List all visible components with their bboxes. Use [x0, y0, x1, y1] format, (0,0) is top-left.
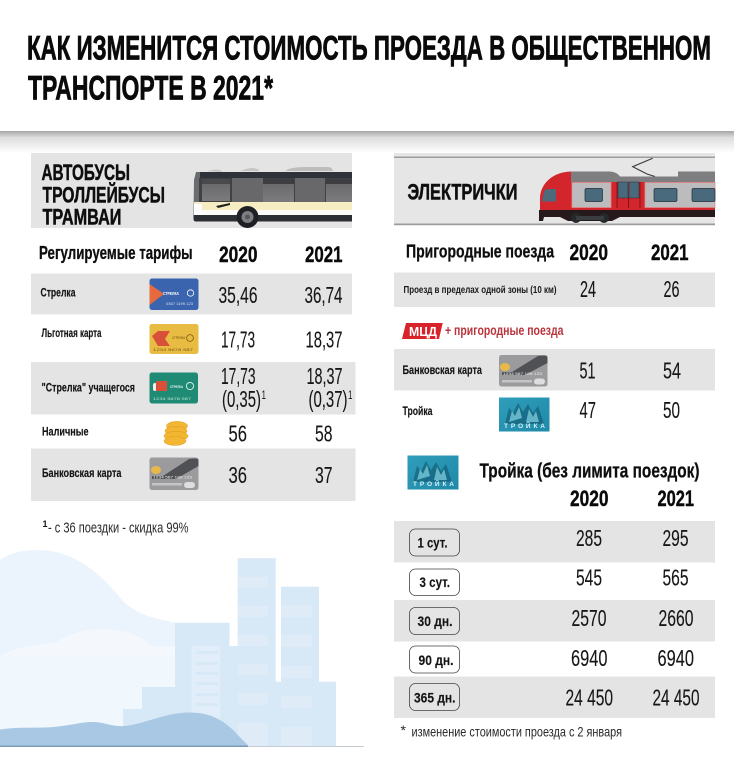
column headings: regulated fares: 2021 — [305, 242, 342, 267]
row: 3 days: 545 — [576, 564, 602, 590]
icon: green student card: 1234 5678 987 — [153, 397, 191, 401]
row: student Strelka: (0,35) — [222, 386, 261, 412]
heading: unlimited Troika: 2021 — [658, 486, 694, 511]
icon: green student card: СТРЕЛКА — [170, 384, 183, 389]
column headings: commuter trains: Пригородные поезда — [406, 242, 555, 262]
row: 90 days: 6940 — [571, 645, 608, 671]
panel: buses, trolleybuses, trams — [31, 153, 356, 536]
row: discount card — [42, 324, 342, 354]
row: single zone trip: 24 — [580, 276, 596, 302]
column headings: regulated fares: Регулируемые тарифы — [39, 243, 192, 263]
row: 90 days: 6940 — [658, 645, 694, 671]
icon: Troika card: ТРОЙКА — [413, 479, 454, 488]
icon: bank card — [150, 458, 198, 490]
column headings: commuter trains: 2021 — [651, 240, 688, 265]
row: 3 days: 565 — [662, 564, 688, 590]
row: bank card: 36 — [228, 462, 247, 488]
row: 365 days: 24 450 — [652, 684, 700, 710]
heading: unlimited Troika — [408, 456, 700, 511]
icon: yellow discount card: 1234 5678 987 — [153, 348, 193, 352]
row: bank card: Банковская карта — [42, 468, 122, 480]
row: 30 days: 30 дн. — [418, 613, 452, 629]
row: student Strelka: (0,37) — [308, 386, 348, 412]
row: single zone trip: 26 — [664, 276, 680, 302]
column headings: commuter trains: 2020 — [570, 240, 608, 265]
row: Strelka: 36,74 — [304, 282, 343, 308]
row: 30 days: 2660 — [658, 605, 694, 631]
icon: Troika card: ТРОЙКА — [504, 421, 545, 430]
row: MCD Troika — [402, 397, 680, 432]
row: student Strelka: 1 — [348, 388, 353, 402]
icon: green student card — [150, 372, 198, 404]
row: discount card: 18,37 — [306, 326, 342, 352]
row: MCD Troika: 47 — [580, 397, 596, 423]
icon: yellow discount card: СТРЕЛКА — [172, 335, 185, 340]
column headings: commuter trains — [406, 240, 688, 265]
row: 30 days: 2570 — [572, 605, 606, 631]
row: MCD Troika: Тройка — [402, 406, 433, 418]
row: 1 day: 295 — [662, 525, 688, 551]
row: Strelka: 35,46 — [218, 282, 258, 308]
row: student Strelka: 17,73 — [221, 363, 256, 389]
header: commuter trains — [394, 153, 715, 226]
icon: Strelka card: СТРЕЛКА — [163, 291, 180, 296]
header: commuter trains: ЭЛЕКТРИЧКИ — [408, 180, 518, 204]
row: 30 days — [394, 600, 715, 642]
footnote: 36 trips discount: 1 — [42, 519, 48, 529]
row: MCD bank card — [394, 349, 715, 390]
row: cash: 56 — [228, 420, 247, 446]
heading: unlimited Troika: 2020 — [570, 486, 608, 511]
icon: Strelka card: 0367 1199 123 — [166, 302, 193, 306]
header: buses: ТРАМВАИ — [42, 204, 122, 230]
row: MCD Troika: 50 — [663, 397, 680, 423]
icon: yellow discount card — [150, 324, 198, 354]
row: 365 days — [394, 676, 715, 718]
icon: bus — [194, 167, 352, 228]
row: MCD bank card: Банковская карта — [402, 365, 482, 377]
row: cash: 58 — [315, 420, 332, 446]
row: 1 day: 1 сут. — [418, 534, 448, 550]
footnote: 36 trips discount: - с 36 поездки - скидка 99% — [48, 520, 188, 536]
icon: coins — [164, 421, 188, 445]
icon: bank card — [499, 355, 548, 386]
header: buses — [31, 153, 352, 230]
row: cash — [42, 420, 332, 446]
row: student Strelka: "Стрелка" учащегося — [42, 382, 135, 394]
illustration: city skyline — [0, 550, 364, 747]
icon: train — [539, 158, 715, 223]
icon: bank card: 1234 567 189 123 — [153, 474, 193, 480]
row: 365 days: 365 дн. — [414, 690, 456, 706]
column headings: regulated fares — [39, 242, 342, 267]
row: 90 days: 90 дн. — [418, 652, 454, 668]
header: buses: ТРОЛЛЕЙБУСЫ — [42, 182, 165, 208]
row: cash: Наличные — [42, 426, 88, 438]
row: student Strelka: 1 — [262, 388, 266, 402]
icon: Troika card — [499, 398, 550, 432]
footnote: from 2 January: * — [400, 722, 406, 738]
icon: bank card: 1234 567 189 123 — [503, 371, 543, 376]
icon: Strelka card — [150, 278, 198, 310]
row: 1 day — [394, 521, 715, 562]
heading: MCD plus commuter trains: + пригородные поезда — [445, 323, 564, 338]
row: single zone trip: Проезд в пределах одной зоны (10 км) — [404, 285, 556, 296]
heading: MCD plus commuter trains — [402, 323, 564, 339]
icon: Troika card — [408, 456, 458, 490]
footnote: from 2 January: изменение стоимости проезда с 2 января — [412, 724, 622, 740]
title: ТРАНСПОРТЕ В 2021* — [28, 70, 274, 108]
row: bank card — [31, 448, 356, 501]
row: 1 day: 285 — [576, 525, 602, 551]
title — [27, 30, 711, 108]
row: MCD bank card: 51 — [580, 358, 596, 384]
row: discount card: Льготная карта — [42, 328, 102, 340]
row: 365 days: 24 450 — [566, 684, 613, 710]
footnote: from 2 January — [400, 722, 622, 740]
row: student Strelka: 18,37 — [306, 363, 342, 389]
header: buses: АВТОБУСЫ — [42, 160, 130, 185]
row: Strelka — [31, 274, 352, 314]
row: 3 days — [410, 564, 688, 596]
heading: MCD plus commuter trains: МЦД — [409, 324, 438, 339]
row: 90 days — [410, 645, 694, 673]
row: discount card: 17,73 — [221, 326, 255, 352]
row: bank card: 37 — [315, 462, 332, 488]
column headings: regulated fares: 2020 — [219, 242, 258, 267]
row: 3 days: 3 сут. — [420, 574, 450, 590]
row: single zone trip — [394, 272, 715, 307]
panel: commuter trains — [394, 153, 715, 740]
row: MCD bank card: 54 — [663, 358, 681, 384]
row: Strelka: Стрелка — [40, 288, 76, 300]
row: student Strelka — [31, 362, 356, 414]
